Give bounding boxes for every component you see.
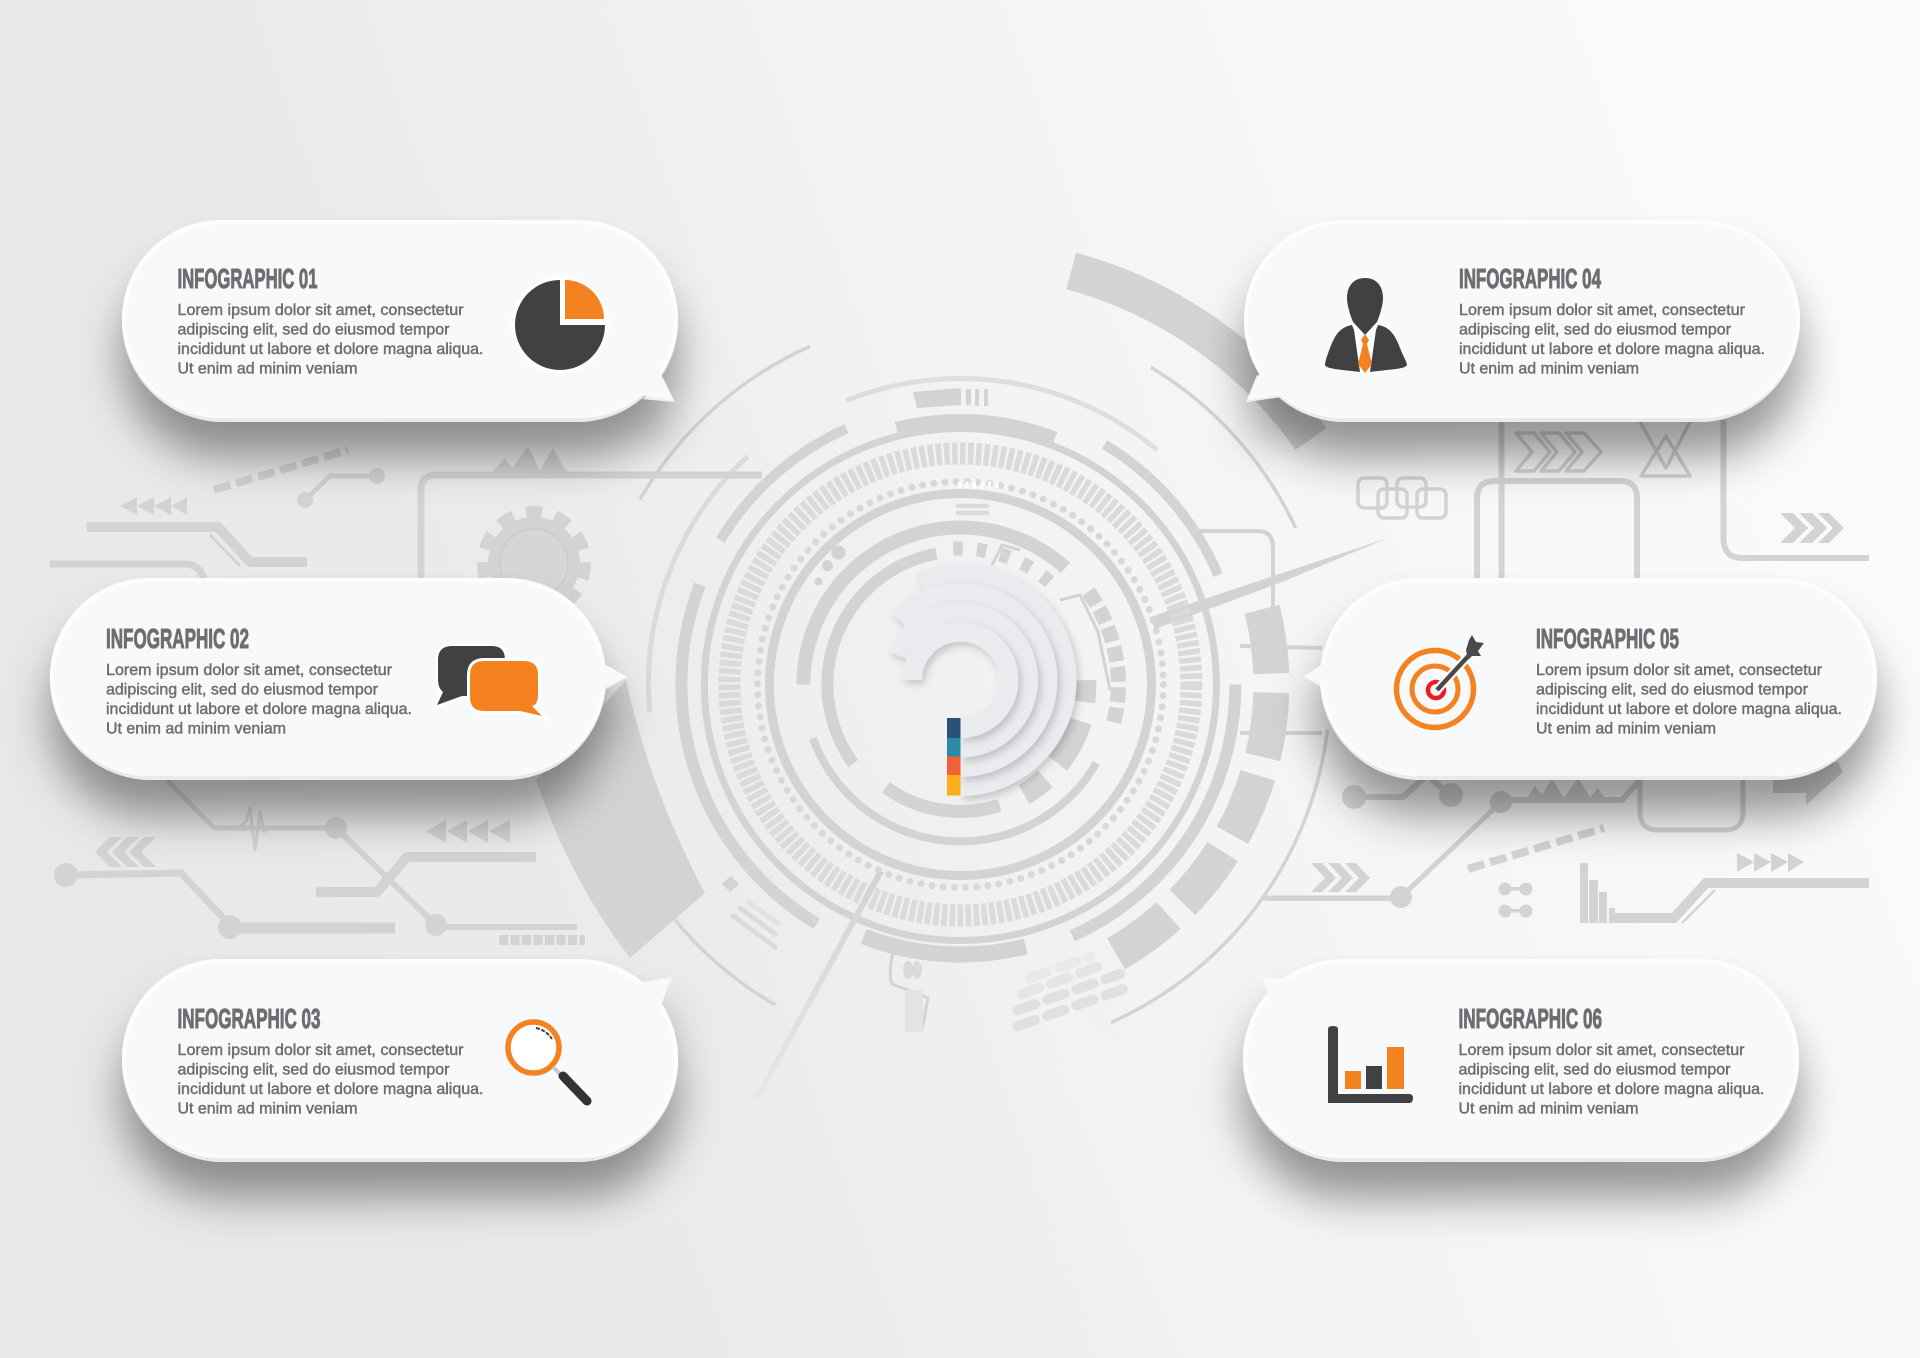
panel: infographic 02 [50, 578, 628, 780]
text block 06: adipiscing elit, sed do eiusmod tempor [1458, 1062, 1730, 1078]
text block 02: incididunt ut labore et dolore magna aliqua. [106, 701, 412, 718]
icon: magnifying glass [508, 1022, 587, 1101]
colour bars [947, 718, 960, 796]
icon: businessman [1325, 278, 1407, 373]
text block 03 [178, 1042, 484, 1118]
heading 04: INFOGRAPHIC 04 [1459, 263, 1601, 294]
dial details [722, 388, 1132, 1098]
heading 03: INFOGRAPHIC 03 [178, 1003, 320, 1034]
spiral band 3 [891, 583, 1057, 777]
spiral band 1 [902, 622, 1018, 738]
text block 03: Ut enim ad minim veniam [178, 1100, 358, 1118]
text block 02 [106, 662, 412, 738]
panel 05 speech bubble [1303, 578, 1877, 780]
panel 04 speech bubble [1244, 220, 1800, 422]
text block 04: Lorem ipsum dolor sit amet, consectetur [1459, 302, 1745, 319]
text block 01: Ut enim ad minim veniam [178, 360, 358, 378]
text block 06: Ut enim ad minim veniam [1458, 1100, 1638, 1118]
text block 02: adipiscing elit, sed do eiusmod tempor [106, 682, 378, 698]
text block 06: incididunt ut labore et dolore magna aliqua. [1458, 1081, 1764, 1098]
right circuit decoration [1150, 420, 1869, 923]
text block 04: Ut enim ad minim veniam [1459, 360, 1639, 378]
text block 02: Ut enim ad minim veniam [106, 720, 286, 738]
text block 01 [178, 302, 484, 378]
text block 06: Lorem ipsum dolor sit amet, consectetur [1458, 1042, 1744, 1059]
text block 02: Lorem ipsum dolor sit amet, consectetur [106, 662, 392, 679]
panel: infographic 06 [1243, 959, 1799, 1162]
text block 01: adipiscing elit, sed do eiusmod tempor [178, 322, 450, 338]
spiral band 4 [917, 564, 1077, 796]
panel: infographic 05 [1303, 578, 1877, 780]
text block 01: Lorem ipsum dolor sit amet, consectetur [178, 302, 464, 319]
text block 03: adipiscing elit, sed do eiusmod tempor [178, 1062, 450, 1078]
text block 05: incididunt ut labore et dolore magna aliqua. [1536, 701, 1842, 718]
panel 06 speech bubble [1243, 959, 1799, 1162]
text block 04: adipiscing elit, sed do eiusmod tempor [1459, 322, 1731, 338]
text block 03: incididunt ut labore et dolore magna aliqua. [178, 1081, 484, 1098]
icon: bar chart [1328, 1026, 1413, 1103]
heading 02: INFOGRAPHIC 02 [106, 623, 249, 654]
text block 04 [1459, 302, 1765, 378]
question-mark spiral [888, 564, 1077, 796]
panel 03 speech bubble [122, 959, 678, 1162]
panel: infographic 03 [122, 959, 678, 1162]
icon: speech bubbles [437, 646, 542, 716]
text block 06 [1458, 1042, 1764, 1118]
heading 01: INFOGRAPHIC 01 [178, 263, 318, 294]
text block 03: Lorem ipsum dolor sit amet, consectetur [178, 1042, 464, 1059]
heading 06: INFOGRAPHIC 06 [1458, 1003, 1602, 1034]
icon: target with arrow [1396, 635, 1484, 728]
central dial [436, 160, 1485, 1209]
left circuit decoration [50, 447, 762, 958]
heading 05: INFOGRAPHIC 05 [1536, 623, 1679, 654]
text block 04: incididunt ut labore et dolore magna aliqua. [1459, 341, 1765, 358]
text block 05: Lorem ipsum dolor sit amet, consectetur [1536, 662, 1822, 679]
panel 01 speech bubble [122, 220, 678, 422]
text block 05: adipiscing elit, sed do eiusmod tempor [1536, 682, 1808, 698]
panel: infographic 01 [122, 220, 678, 422]
text block 01: incididunt ut labore et dolore magna aliqua. [178, 341, 484, 358]
panel: infographic 04 [1244, 220, 1800, 422]
icon: pie chart [511, 276, 609, 374]
spiral band 2 [888, 602, 1038, 758]
text block 05 [1536, 662, 1842, 738]
panel 02 speech bubble [50, 578, 628, 780]
text block 05: Ut enim ad minim veniam [1536, 720, 1716, 738]
